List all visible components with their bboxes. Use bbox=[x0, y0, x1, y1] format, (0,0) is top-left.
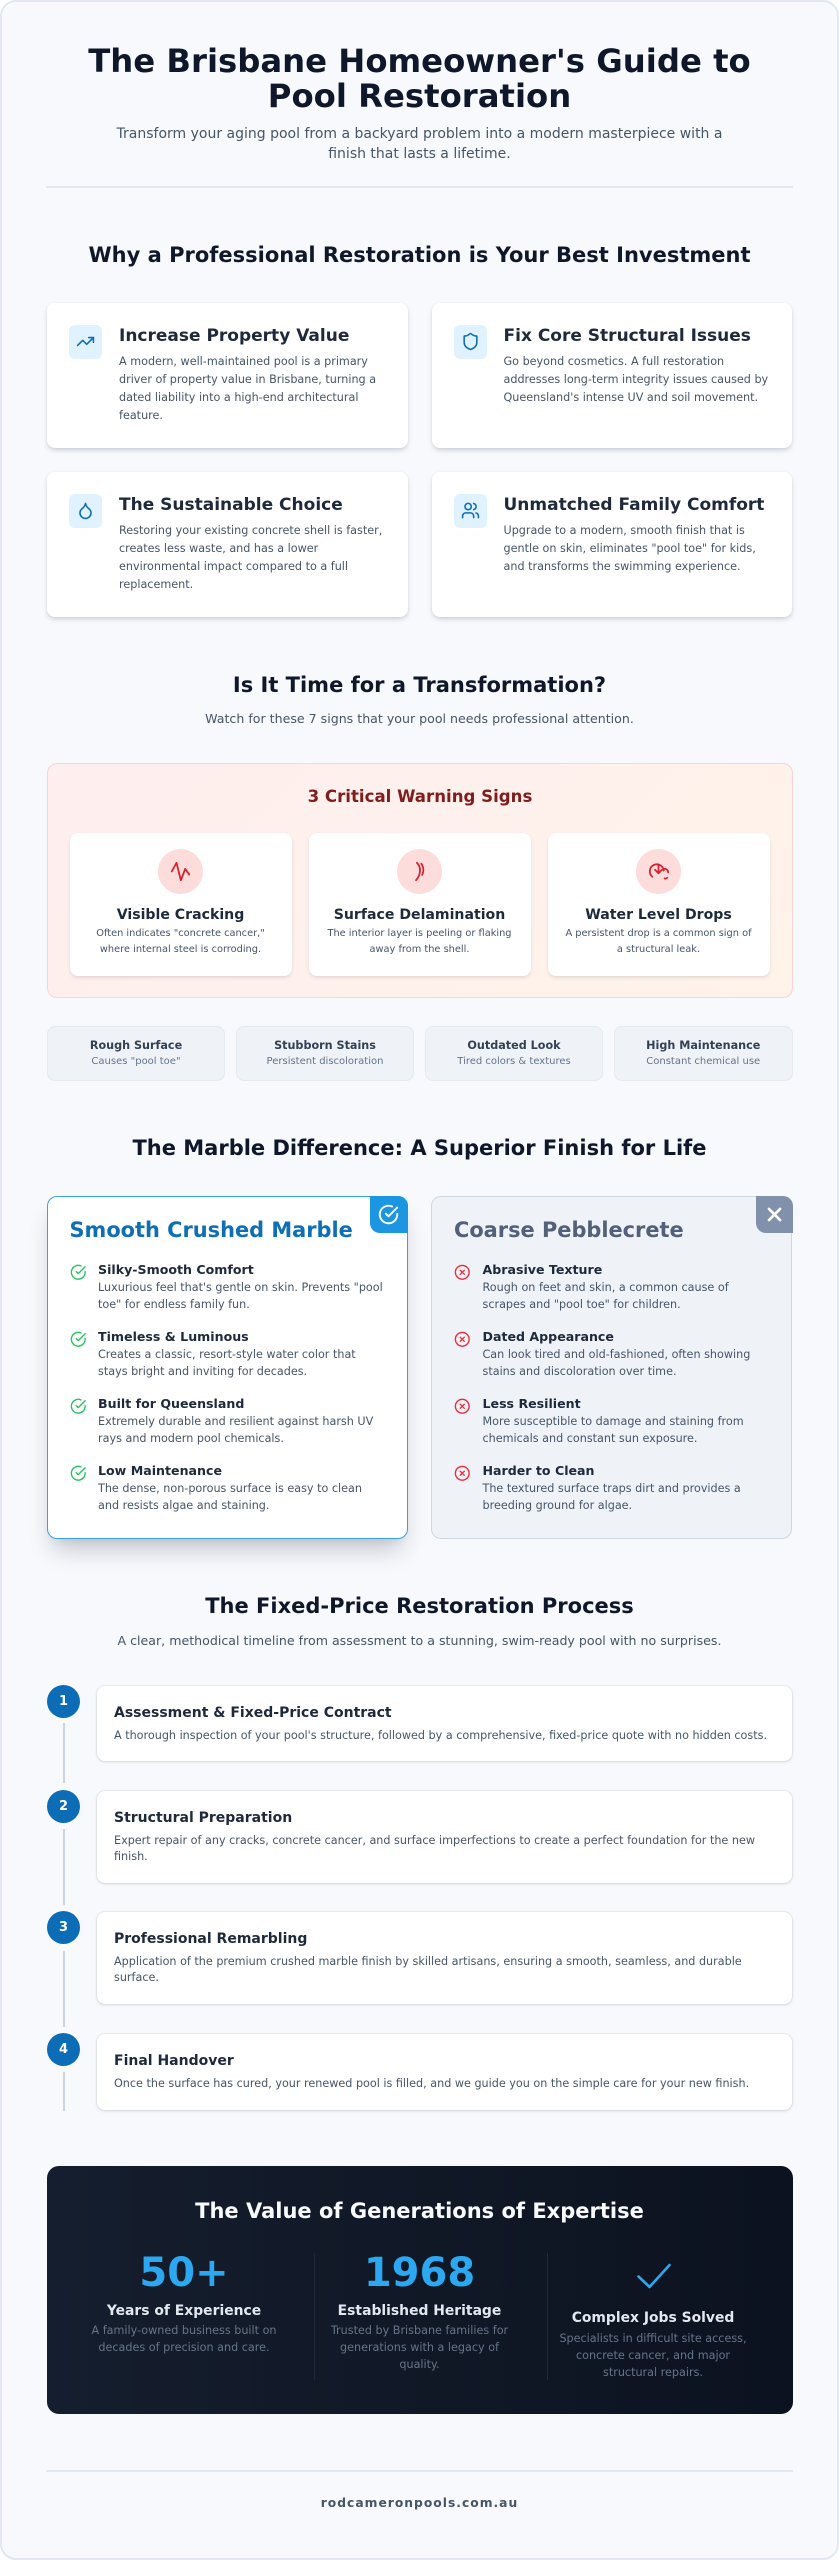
text: a structural leak. bbox=[617, 944, 700, 955]
title: Pool Restoration bbox=[268, 77, 571, 115]
item text bbox=[98, 1281, 383, 1311]
text: quality. bbox=[399, 2358, 440, 2370]
step card bbox=[97, 1912, 792, 2004]
item text: scrapes and "pool toe" for children. bbox=[482, 1298, 681, 1311]
panel title: Smooth Crushed Marble bbox=[70, 1218, 353, 1242]
card text bbox=[504, 524, 756, 573]
timeline step 2 bbox=[47, 1790, 793, 1905]
subtitle: Transform your aging pool from a backyard problem into a modern masterpiece with a bbox=[117, 126, 722, 142]
title: Surface Delamination bbox=[334, 907, 505, 923]
stat: complex jobs bbox=[536, 2250, 770, 2380]
step text: Expert repair of any cracks, concrete cancer, and surface imperfections to create a perfect foundation for the new bbox=[114, 1834, 755, 1846]
number 4 bbox=[47, 2033, 80, 2066]
sign: rough surface bbox=[47, 1026, 225, 1081]
text: Persistent discoloration bbox=[267, 1056, 383, 1067]
label: Complex Jobs Solved bbox=[572, 2310, 734, 2326]
card text bbox=[504, 354, 768, 404]
text: away from the shell. bbox=[370, 944, 469, 955]
step text: surface. bbox=[114, 1971, 159, 1984]
item text bbox=[482, 1482, 741, 1512]
section intro: A clear, methodical timeline from assessment to a stunning, swim-ready pool with no surprises. bbox=[118, 1633, 721, 1648]
icon: check bbox=[70, 1264, 86, 1280]
text: Constant chemical use bbox=[646, 1056, 760, 1067]
panel heading: The Value of Generations of Expertise bbox=[195, 2199, 644, 2223]
subtitle bbox=[116, 126, 722, 162]
item text: Rough on feet and skin, a common cause of bbox=[482, 1281, 729, 1294]
warning: water level drops bbox=[548, 833, 770, 976]
item text: Luxurious feel that's gentle on skin. Prevents "pool bbox=[98, 1281, 383, 1294]
card text bbox=[119, 524, 382, 591]
number 4: 4 bbox=[59, 2042, 68, 2057]
icon: users bbox=[454, 494, 486, 528]
step text: Once the surface has cured, your renewed pool is filled, and we guide you on the simple care for your new finish. bbox=[114, 2076, 749, 2090]
title: Outdated Look bbox=[467, 1039, 561, 1052]
icon: check bbox=[636, 2263, 670, 2289]
icon: check bbox=[70, 1332, 86, 1347]
card: fix structural issues bbox=[432, 303, 792, 448]
label: Established Heritage bbox=[338, 2302, 501, 2318]
item text: and resists algae and staining. bbox=[98, 1499, 269, 1512]
icon: shield bbox=[454, 325, 486, 358]
heading: why restoration: Why a Professional Restoration is Your Best Investment bbox=[88, 243, 750, 267]
item title: Silky-Smooth Comfort bbox=[98, 1262, 254, 1277]
subtitle: finish that lasts a lifetime. bbox=[328, 146, 511, 162]
title: Water Level Drops bbox=[585, 907, 732, 923]
text bbox=[96, 928, 265, 955]
card text: addresses long-term integrity issues caused by bbox=[504, 373, 768, 386]
badge: check bbox=[370, 1196, 408, 1233]
text: A family-owned business built on bbox=[91, 2324, 276, 2336]
panel heading: 3 Critical Warning Signs bbox=[308, 787, 532, 806]
icon: cross bbox=[454, 1264, 470, 1280]
sign: stubborn stains bbox=[236, 1026, 414, 1081]
title: The Brisbane Homeowner's Guide to bbox=[88, 42, 751, 80]
section intro: Watch for these 7 signs that your pool needs professional attention. bbox=[205, 711, 634, 726]
icon: trending up bbox=[69, 325, 102, 358]
item bbox=[454, 1262, 729, 1311]
text bbox=[68, 2322, 300, 2356]
sign: high maintenance bbox=[614, 1026, 792, 1081]
card text: Restoring your existing concrete shell is faster, bbox=[119, 524, 382, 536]
panel: coarse pebblecrete bbox=[431, 1196, 792, 1539]
icon: crack bbox=[158, 849, 203, 894]
number 3: 3 bbox=[59, 1920, 68, 1935]
timeline step 4 bbox=[47, 2033, 793, 2112]
card text: creates less waste, and has a lower bbox=[119, 542, 318, 555]
item bbox=[70, 1396, 374, 1445]
step card bbox=[97, 1686, 792, 1761]
item text: Creates a classic, resort-style water color that bbox=[98, 1348, 356, 1361]
step text: Application of the premium crushed marble finish by skilled artisans, ensuring a smooth, seamless, and durable bbox=[114, 1954, 742, 1968]
text bbox=[327, 928, 512, 955]
number: 1968 bbox=[364, 2250, 475, 2296]
step text: finish. bbox=[114, 1850, 148, 1863]
card text: environmental impact compared to a full bbox=[119, 560, 348, 573]
timeline step 3 bbox=[47, 1911, 793, 2027]
item title: Harder to Clean bbox=[482, 1463, 595, 1478]
icon: check bbox=[70, 1398, 86, 1414]
item bbox=[454, 1396, 744, 1445]
warning: surface delamination bbox=[308, 833, 530, 976]
text: generations with a legacy of bbox=[340, 2340, 499, 2354]
step title: Final Handover bbox=[114, 2052, 234, 2068]
step text bbox=[114, 1834, 755, 1863]
icon: peeling bbox=[397, 849, 442, 894]
heading: marble difference: The Marble Difference: A Superior Finish for Life bbox=[132, 1136, 707, 1160]
step card bbox=[97, 1791, 792, 1883]
step title: Professional Remarbling bbox=[114, 1930, 307, 1946]
text: Trusted by Brisbane families for bbox=[331, 2324, 508, 2336]
item title: Less Resilient bbox=[482, 1396, 581, 1411]
card: sustainable choice bbox=[47, 472, 408, 617]
item text: breeding ground for algae. bbox=[482, 1499, 632, 1512]
item title: Built for Queensland bbox=[98, 1396, 244, 1411]
card: family comfort bbox=[432, 472, 792, 617]
icon: cross bbox=[454, 1466, 470, 1481]
step text bbox=[114, 1954, 742, 1984]
item text bbox=[98, 1482, 362, 1512]
card text: A modern, well-maintained pool is a primary bbox=[119, 354, 368, 368]
heading: transformation: Is It Time for a Transformation? bbox=[233, 673, 606, 697]
text: concrete cancer, and major bbox=[576, 2349, 730, 2362]
card title: Unmatched Family Comfort bbox=[504, 495, 764, 515]
item text: stains and discoloration over time. bbox=[482, 1365, 677, 1378]
item text bbox=[98, 1348, 356, 1378]
title: Rough Surface bbox=[90, 1039, 182, 1052]
text: The interior layer is peeling or flaking bbox=[327, 928, 512, 939]
text: A persistent drop is a common sign of bbox=[565, 928, 752, 939]
item text: The dense, non-porous surface is easy to clean bbox=[98, 1482, 362, 1495]
step title: Assessment & Fixed-Price Contract bbox=[114, 1704, 392, 1720]
item title: Abrasive Texture bbox=[482, 1262, 602, 1277]
badge: cross bbox=[756, 1196, 793, 1233]
item bbox=[70, 1262, 383, 1311]
item text: More susceptible to damage and staining from bbox=[482, 1415, 744, 1428]
panel: critical warning signs bbox=[47, 763, 793, 998]
sign: outdated look bbox=[425, 1026, 603, 1081]
item text: stays bright and inviting for decades. bbox=[98, 1365, 307, 1378]
icon: cross bbox=[454, 1332, 470, 1347]
text: Often indicates "concrete cancer," bbox=[96, 928, 265, 939]
icon: water drop arrow bbox=[636, 849, 681, 894]
card text: and transforms the swimming experience. bbox=[504, 560, 741, 573]
item text: Can look tired and old-fashioned, often showing bbox=[482, 1348, 750, 1361]
card text: dated liability into a high-end architectural bbox=[119, 391, 358, 404]
item title: Low Maintenance bbox=[98, 1463, 222, 1478]
panel: expertise stats bbox=[46, 2166, 792, 2414]
step text: A thorough inspection of your pool's structure, followed by a comprehensive, fixed-price quote with no hidden costs. bbox=[114, 1728, 767, 1742]
icon: check bbox=[70, 1466, 86, 1481]
text: structural repairs. bbox=[603, 2366, 703, 2379]
step card bbox=[97, 2034, 792, 2110]
stat: heritage bbox=[303, 2250, 536, 2380]
number 3 bbox=[47, 1911, 80, 1944]
card: increase property value bbox=[47, 303, 408, 448]
card text: gentle on skin, eliminates "pool toe" for kids, bbox=[504, 542, 756, 555]
card text: Go beyond cosmetics. A full restoration bbox=[504, 354, 724, 368]
item bbox=[70, 1329, 356, 1378]
item title: Timeless & Luminous bbox=[98, 1329, 249, 1344]
card title: Fix Core Structural Issues bbox=[504, 326, 751, 346]
text: Specialists in difficult site access, bbox=[559, 2332, 747, 2345]
title: Stubborn Stains bbox=[274, 1039, 376, 1052]
step title: Structural Preparation bbox=[114, 1810, 292, 1826]
item text: rays and modern pool chemicals. bbox=[98, 1432, 284, 1445]
card text bbox=[119, 354, 376, 422]
text: Tired colors & textures bbox=[457, 1056, 571, 1067]
card text: replacement. bbox=[119, 578, 193, 591]
number 2 bbox=[47, 1790, 80, 1823]
item text: chemicals and constant sun exposure. bbox=[482, 1432, 697, 1445]
stat: years bbox=[91, 2250, 276, 2354]
label: Years of Experience bbox=[107, 2302, 261, 2318]
text bbox=[303, 2322, 536, 2372]
card text: Upgrade to a modern, smooth finish that is bbox=[504, 524, 745, 536]
text bbox=[536, 2330, 770, 2381]
number: 50+ bbox=[139, 2250, 229, 2296]
card title: The Sustainable Choice bbox=[119, 495, 343, 515]
item text bbox=[482, 1281, 729, 1311]
item text bbox=[482, 1348, 750, 1378]
icon: cross bbox=[454, 1398, 470, 1414]
panel title: Coarse Pebblecrete bbox=[454, 1218, 684, 1242]
item bbox=[454, 1463, 741, 1512]
text: decades of precision and care. bbox=[98, 2340, 270, 2354]
number 2: 2 bbox=[59, 1799, 68, 1814]
item text: Extremely durable and resilient against harsh UV bbox=[98, 1415, 373, 1428]
footer url: rodcameronpools.com.au bbox=[321, 2496, 518, 2510]
number 1: 1 bbox=[59, 1694, 68, 1709]
text bbox=[565, 928, 752, 955]
card title: Increase Property Value bbox=[119, 326, 349, 346]
card text: Queensland's intense UV and soil movement. bbox=[504, 391, 758, 404]
text: where internal steel is corroding. bbox=[100, 944, 261, 955]
card text: feature. bbox=[119, 409, 163, 422]
item text bbox=[482, 1415, 744, 1445]
timeline step 1 bbox=[47, 1685, 793, 1783]
text: Causes "pool toe" bbox=[91, 1056, 181, 1067]
title bbox=[88, 42, 751, 115]
icon: droplet bbox=[69, 494, 102, 528]
number 1 bbox=[47, 1685, 80, 1718]
title: Visible Cracking bbox=[117, 907, 244, 923]
card text: driver of property value in Brisbane, turning a bbox=[119, 373, 376, 386]
panel: smooth crushed marble bbox=[46, 1196, 408, 1539]
item text: The textured surface traps dirt and provides a bbox=[482, 1482, 741, 1495]
item bbox=[454, 1329, 750, 1378]
heading: process: The Fixed-Price Restoration Process bbox=[205, 1594, 634, 1618]
item text: toe" for endless family fun. bbox=[98, 1298, 250, 1311]
item text bbox=[98, 1415, 374, 1445]
title: High Maintenance bbox=[646, 1039, 760, 1052]
item bbox=[70, 1463, 362, 1512]
warning: visible cracking bbox=[70, 833, 292, 976]
item title: Dated Appearance bbox=[482, 1329, 614, 1344]
